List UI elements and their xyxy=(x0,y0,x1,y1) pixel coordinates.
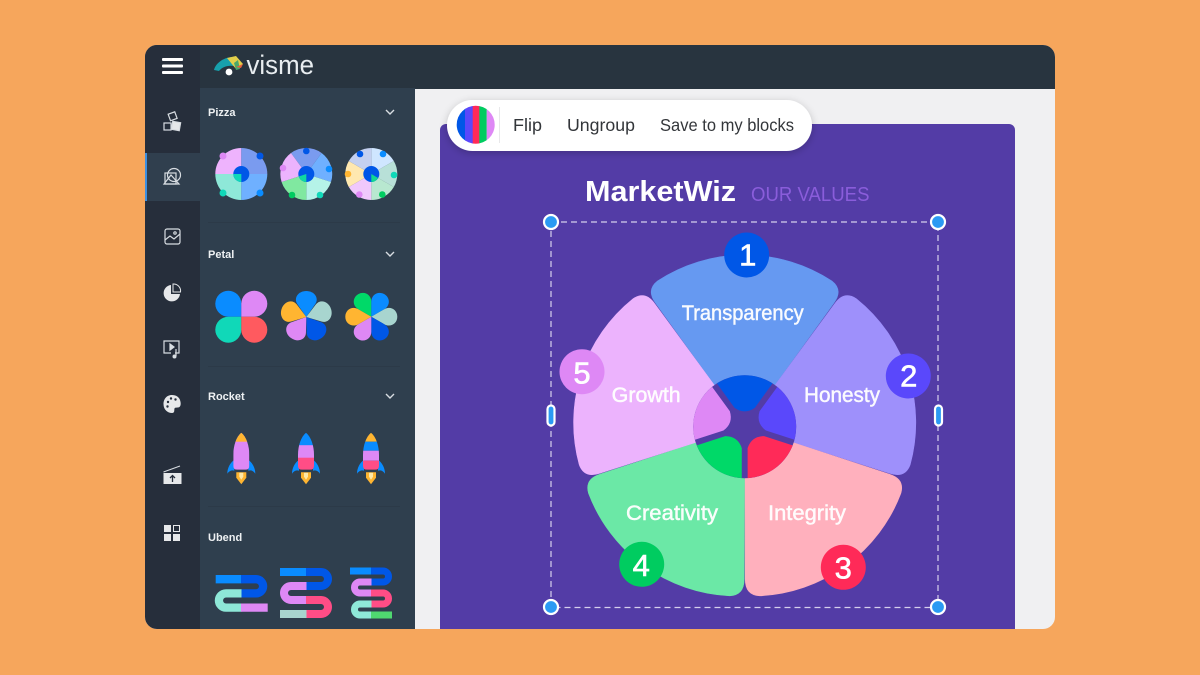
slide title: MarketWiz xyxy=(585,176,736,208)
floating toolbar xyxy=(447,100,812,151)
top bar xyxy=(145,45,1055,89)
icon: hamburger menu xyxy=(162,58,183,74)
petal labels: Transparency xyxy=(682,302,804,325)
panel section: Petal xyxy=(208,249,397,344)
number badges: 1 xyxy=(739,238,756,272)
petal: Growth xyxy=(552,285,774,516)
icon: image xyxy=(165,229,180,244)
toolbar actions: Flip xyxy=(513,115,542,135)
toolbar actions xyxy=(513,115,794,135)
selected rail item xyxy=(145,153,200,201)
panel section: Rocket: Rocket xyxy=(208,391,245,403)
corner handles xyxy=(544,215,945,614)
toolbar actions: Ungroup xyxy=(567,115,635,135)
panel section: Rocket xyxy=(208,391,394,484)
icon: pie chart xyxy=(164,284,181,301)
left rail xyxy=(145,45,200,629)
petal block 1 xyxy=(215,291,267,343)
app window xyxy=(145,45,1055,644)
rocket block 2 xyxy=(292,433,320,484)
icon: shapes xyxy=(164,168,180,184)
toolbar actions: Save to my blocks xyxy=(660,115,794,135)
side panel xyxy=(200,88,415,629)
number badges: 3 xyxy=(835,550,852,585)
icon: blocks xyxy=(164,112,181,131)
slide title xyxy=(585,176,870,208)
icon: upload folder xyxy=(164,466,182,484)
petal labels xyxy=(612,302,880,525)
petal block 2 xyxy=(278,291,334,344)
purple slide card xyxy=(440,124,1015,644)
slide title: OUR VALUES xyxy=(751,184,870,206)
panel section: Pizza: Pizza xyxy=(208,107,236,119)
pizza block 3 xyxy=(345,148,397,200)
icon: grid xyxy=(164,525,180,541)
petal: Transparency xyxy=(651,255,838,427)
visme logo: visme xyxy=(246,50,314,80)
side handles xyxy=(548,406,942,426)
petal labels: Honesty xyxy=(804,384,880,407)
petal: Integrity xyxy=(669,372,921,621)
petal block 3 xyxy=(345,290,397,344)
pizza block 2 xyxy=(280,148,332,200)
number badges xyxy=(560,232,931,590)
rocket block 1 xyxy=(227,433,255,484)
rocket block 3 xyxy=(357,433,385,484)
petal labels: Growth xyxy=(612,384,681,407)
number badges: 2 xyxy=(900,359,917,394)
ubend block 2 xyxy=(280,572,328,614)
ubend block 3 xyxy=(350,571,392,615)
ubend block 1 xyxy=(216,579,268,608)
number badges: 4 xyxy=(633,548,650,583)
pentagon diagram xyxy=(552,232,937,621)
canvas area xyxy=(145,45,1055,629)
selection box xyxy=(544,215,945,614)
panel section: Ubend xyxy=(208,532,392,615)
inner hub xyxy=(687,375,802,485)
icon: palette xyxy=(164,395,181,413)
number badges: 5 xyxy=(573,355,591,390)
pizza block 1 xyxy=(215,148,267,200)
panel section: Pizza xyxy=(208,107,397,200)
petal labels: Creativity xyxy=(626,502,719,525)
colour swatch xyxy=(456,105,496,145)
petal: Honesty xyxy=(716,285,937,516)
panel section: Petal: Petal xyxy=(208,249,234,261)
petal labels: Integrity xyxy=(768,502,847,525)
panel section: Ubend: Ubend xyxy=(208,532,242,544)
visme logo xyxy=(214,50,314,80)
icon: video with music note xyxy=(164,341,179,358)
petal: Creativity xyxy=(568,372,820,621)
